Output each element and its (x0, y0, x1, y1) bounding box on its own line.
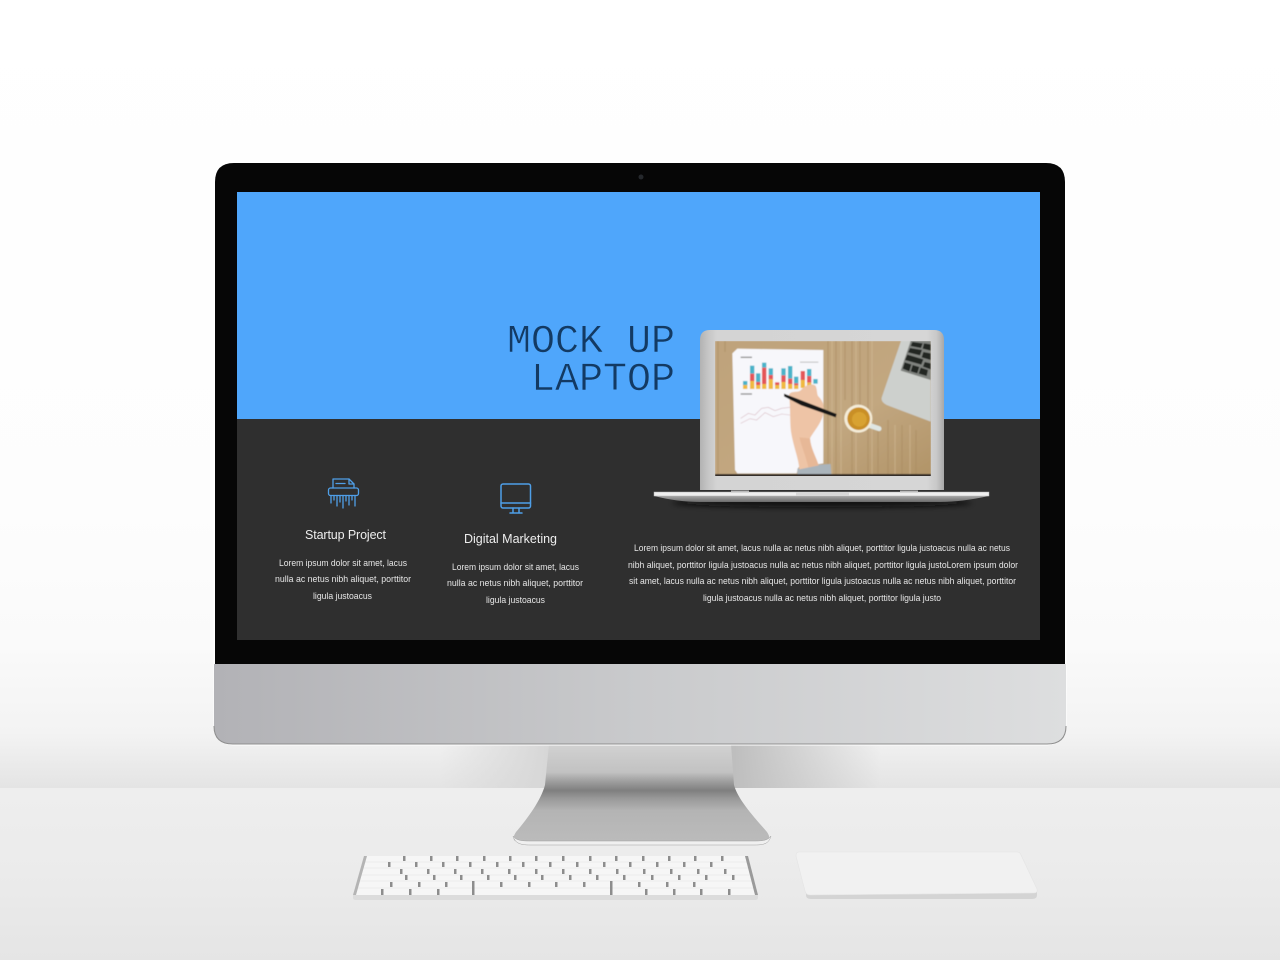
line chart (741, 407, 790, 423)
cup (844, 405, 879, 433)
trackpad lip (806, 890, 1037, 899)
feature: digital marketing (447, 532, 583, 606)
photo bottom edge (715, 474, 931, 476)
paper (732, 349, 823, 473)
trackpad surface (796, 852, 1037, 895)
paragraph under laptop: sit amet, lacus nulla ac netus nibh aliquet, porttitor ligula justoacus nulla ac netus nibh aliquet, porttitor (629, 576, 1016, 587)
monitor chin (214, 664, 1066, 744)
title (507, 320, 675, 403)
keyboard right edge (745, 856, 758, 895)
heading: Startup Project (305, 528, 387, 542)
monitor bezel (215, 163, 1065, 664)
laptop lid (700, 330, 944, 490)
body text: Lorem ipsum dolor sit amet, lacus (279, 558, 407, 569)
camera (638, 174, 644, 180)
wall shadow left of stand (440, 744, 550, 788)
laptop mockup (654, 330, 989, 507)
dark lower panel (237, 419, 1040, 640)
feature: startup project (275, 528, 411, 602)
paragraph under laptop: ligula justoacus nulla ac netus nibh aliquet, porttitor ligula justo (703, 593, 941, 604)
body text (447, 562, 583, 606)
keyboard lip (353, 895, 758, 900)
hand and arm (789, 384, 824, 469)
monitor (214, 162, 1066, 746)
cuff (797, 464, 831, 475)
wall shadow right of stand (731, 744, 881, 788)
hand shading (799, 437, 819, 467)
blue upper panel (237, 192, 1040, 419)
paragraph under laptop: Lorem ipsum dolor sit amet, lacus nulla ac netus nibh aliquet, porttitor ligula justoacus nulla ac netus (634, 543, 1010, 554)
keyboard (353, 856, 758, 900)
paragraph under laptop: nibh aliquet, porttitor ligula justoacus nulla ac netus nibh aliquet, porttitor ligula justoLorem ipsum dolor (628, 560, 1018, 571)
base shadow (672, 499, 972, 507)
icon: desktop monitor (501, 484, 530, 513)
paragraph under laptop (628, 543, 1018, 604)
monitor halo (214, 162, 1066, 746)
body text (275, 558, 411, 602)
screen (237, 192, 1040, 640)
key gaps (381, 856, 734, 895)
small laptop on desk (882, 341, 931, 422)
keyboard body (353, 856, 758, 895)
body text: ligula justoacus (313, 591, 372, 602)
keyboard row lines (355, 862, 756, 888)
body text: ligula justoacus (486, 595, 545, 606)
photo: desk with charts (715, 341, 931, 476)
bar chart (743, 363, 818, 389)
body text: nulla ac netus nibh aliquet, porttitor (275, 574, 411, 585)
trackpad (796, 852, 1037, 899)
laptop base (654, 496, 989, 502)
body text: Lorem ipsum dolor sit amet, lacus (452, 562, 579, 573)
monitor stand (513, 744, 771, 845)
chin bottom edge (214, 726, 1066, 744)
keyboard left edge (353, 856, 367, 895)
wood desk (715, 341, 931, 476)
icon: paper shredder (328, 479, 358, 508)
title: LAPTOP (531, 358, 675, 403)
heading: Digital Marketing (464, 532, 557, 546)
desk surface (0, 788, 1280, 960)
body text: nulla ac netus nibh aliquet, porttitor (447, 578, 583, 589)
pen (784, 394, 837, 417)
title: MOCK UP (507, 320, 675, 365)
